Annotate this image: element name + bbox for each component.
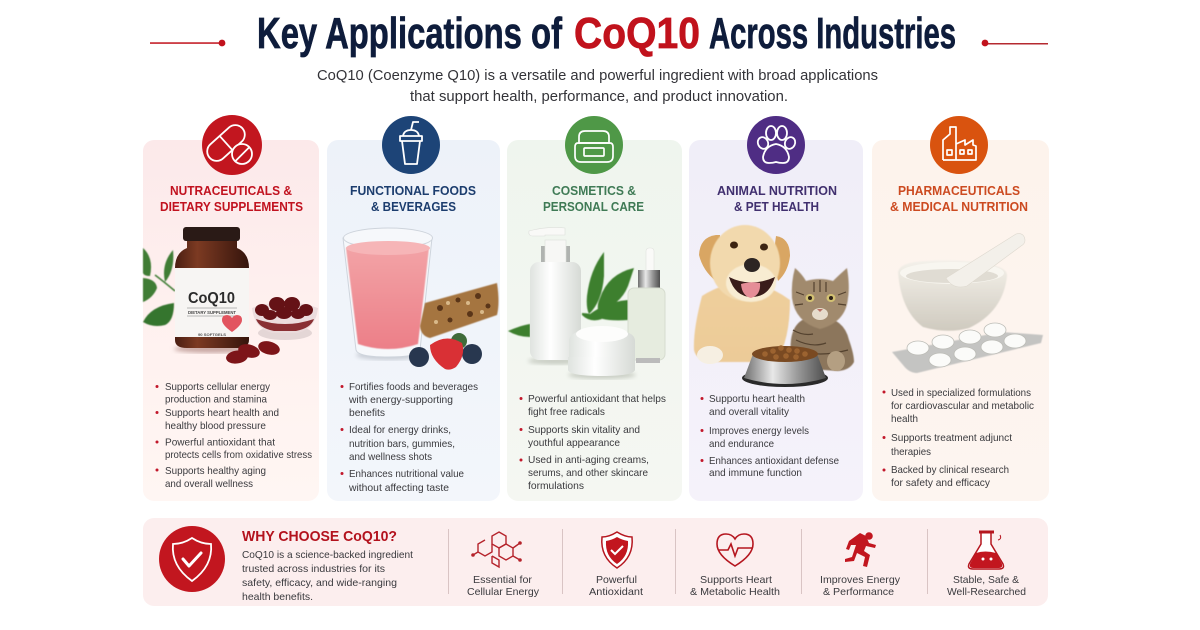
image: supplement bottle [143, 227, 318, 365]
panel: cosmetics [507, 116, 682, 501]
bullet list: without affecting taste [348, 482, 449, 494]
benefit: safety: Stable, Safe & [953, 574, 1019, 586]
benefit: energy: Improves Energy [820, 574, 901, 586]
heading: DIETARY SUPPLEMENTS [160, 199, 303, 214]
why text: trusted across industries for its [242, 563, 385, 575]
icon: heart pulse [717, 534, 753, 566]
panel: why choose CoQ10 [143, 518, 1048, 606]
heading: FUNCTIONAL FOODS [350, 183, 476, 198]
bullet list: Used in specialized formulations [891, 387, 1031, 399]
intro text: that support health, performance, and product innovation. [410, 89, 788, 105]
bullet list: healthy blood pressure [165, 420, 266, 432]
why text: safety, efficacy, and wide-ranging [242, 577, 397, 589]
heading [350, 183, 476, 214]
bullet list: Ideal for energy drinks, [349, 424, 451, 436]
icon: runner [845, 532, 876, 567]
image: smoothie and bar [343, 228, 498, 370]
image: supplement bottle: 90 SOFTGELS [198, 332, 226, 337]
heading: PERSONAL CARE [543, 199, 644, 214]
heading: PHARMACEUTICALS [898, 183, 1020, 198]
title: Key Applications of [257, 9, 562, 58]
heading: NUTRACEUTICALS & [170, 183, 292, 198]
heading: COSMETICS & [552, 183, 636, 198]
bullet list: formulations [528, 480, 584, 492]
heading [717, 183, 837, 214]
dog [694, 225, 790, 364]
bullet list: Supports heart health and [165, 407, 279, 419]
bullet list [520, 393, 666, 492]
why text [242, 549, 413, 603]
icon: flask [968, 530, 1004, 569]
heading [160, 183, 303, 214]
left title ornament [150, 40, 225, 46]
bullet list: production and stamina [165, 394, 267, 406]
bullet list: Powerful antioxidant that [165, 436, 275, 448]
icon: drink cup [382, 116, 440, 174]
panel: nutraceuticals [143, 115, 319, 501]
why text: health benefits. [242, 591, 313, 603]
bullet list: Supports cellular energy [165, 381, 271, 393]
why heading: WHY CHOOSE CoQ10? [242, 528, 397, 545]
benefit: energy: & Performance [823, 586, 894, 598]
bullet list [882, 387, 1034, 489]
bullet list: therapies [891, 446, 931, 458]
bullet list [700, 393, 839, 479]
heading: & BEVERAGES [371, 199, 456, 214]
bullet list: protects cells from oxidative stress [165, 449, 312, 461]
benefit: energy [820, 532, 901, 598]
bullet list: Used in anti-aging creams, [528, 454, 649, 466]
bullet list: and immune function [709, 467, 802, 479]
benefit: safety: Well-Researched [947, 586, 1026, 598]
right title ornament [982, 40, 1048, 46]
heading: & MEDICAL NUTRITION [890, 199, 1028, 214]
bullet list: health [891, 413, 918, 425]
bullet list: Supports skin vitality and [528, 424, 640, 436]
benefit: antioxidant [589, 532, 643, 598]
bullet list: with energy-supporting [348, 394, 453, 406]
bullet list: serums, and other skincare [528, 467, 648, 479]
icon: capsules [202, 115, 262, 175]
benefit: antioxidant: Powerful [596, 574, 637, 586]
bullet list: Supports treatment adjunct [891, 432, 1012, 444]
image: skincare products [508, 227, 665, 379]
benefit: heart health [690, 534, 780, 598]
icon: shield check badge [159, 526, 225, 592]
image: mortar, pestle and tablets [892, 234, 1043, 373]
title: Across Industries [709, 9, 956, 58]
heading [890, 183, 1028, 214]
bullet list: fight free radicals [528, 406, 605, 418]
bullet list: Backed by clinical research [891, 464, 1009, 476]
bullet list: Supportu heart health [709, 393, 805, 405]
bullet list: youthful appearance [528, 437, 620, 449]
benefit: cellular energy: Essential for [473, 574, 533, 586]
heading: ANIMAL NUTRITION [717, 183, 837, 198]
icon: paw [747, 116, 805, 174]
intro text [317, 68, 878, 105]
heading: & PET HEALTH [734, 199, 819, 214]
bullet list: and overall vitality [709, 406, 790, 418]
why text: CoQ10 is a science-backed ingredient [242, 549, 413, 561]
image: supplement bottle: DIETARY SUPPLEMENT [188, 310, 236, 315]
bullet list: Enhances antioxidant defense [709, 455, 839, 467]
benefit: cellular energy [467, 532, 540, 598]
icon: molecule [471, 532, 522, 567]
image: dog, cat and bowl [694, 225, 854, 387]
bullet list: Improves energy levels [709, 425, 809, 437]
bullet list: Enhances nutritional value [349, 468, 464, 480]
benefit: heart health: & Metabolic Health [690, 586, 780, 598]
bullet list: nutrition bars, gummies, [349, 438, 455, 450]
heading [543, 183, 644, 214]
benefit: antioxidant: Antioxidant [589, 586, 643, 598]
title: CoQ10 [574, 9, 700, 58]
image: supplement bottle: CoQ10 [188, 290, 235, 307]
icon: cream jar [565, 116, 623, 174]
bullet list: for cardiovascular and metabolic [891, 400, 1034, 412]
cat [791, 268, 854, 371]
benefit: heart health: Supports Heart [700, 574, 772, 586]
bullet list: benefits [349, 407, 385, 419]
bullet list: Powerful antioxidant that helps [528, 393, 666, 405]
icon: factory [930, 116, 988, 174]
bullet list: and overall wellness [165, 478, 253, 490]
panel: functional foods [327, 116, 500, 501]
panel: animal nutrition [689, 116, 863, 501]
title [257, 9, 956, 58]
intro text: CoQ10 (Coenzyme Q10) is a versatile and powerful ingredient with broad applications [317, 68, 878, 84]
bullet list: Supports healthy aging [165, 465, 266, 477]
panel: pharmaceuticals [872, 116, 1049, 501]
bowl [742, 345, 828, 387]
bullet list: for safety and efficacy [891, 477, 991, 489]
bullet list: and wellness shots [349, 451, 432, 463]
bullet list [340, 381, 478, 494]
bullet list: and endurance [709, 438, 774, 450]
bullet list [156, 381, 312, 490]
bullet list: Fortifies foods and beverages [349, 381, 478, 393]
icon: shield [602, 532, 632, 568]
benefit: safety [947, 530, 1026, 598]
benefit: cellular energy: Cellular Energy [467, 586, 540, 598]
